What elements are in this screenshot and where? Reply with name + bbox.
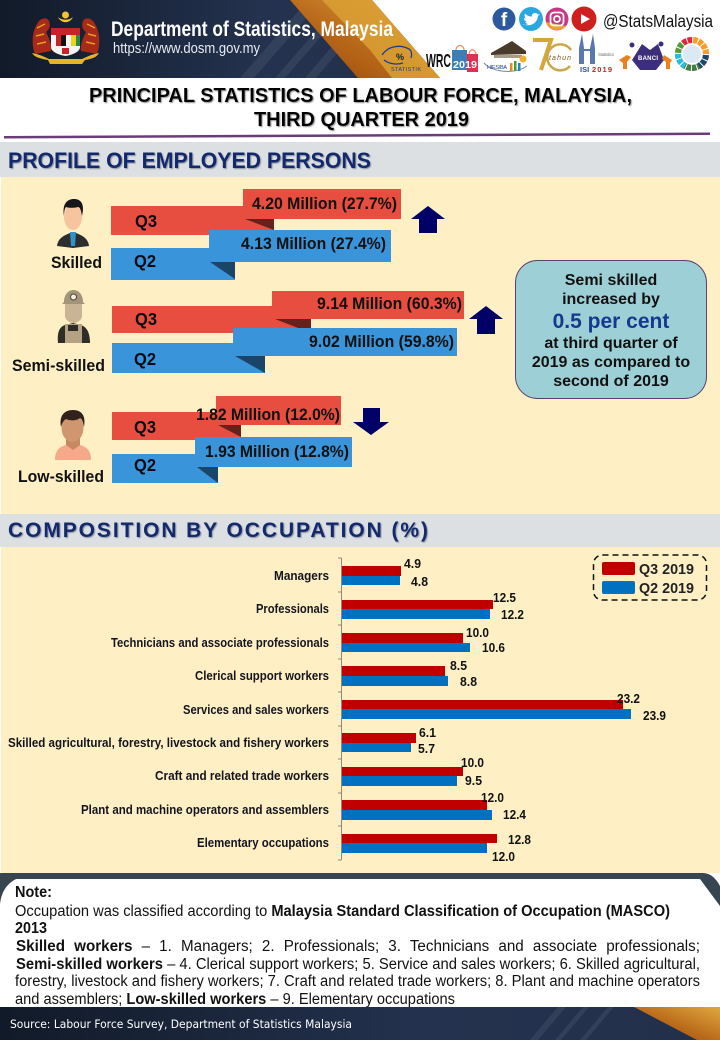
row: plant: Plant and machine operators and assemblers	[81, 803, 329, 817]
social media icons: f	[501, 10, 508, 31]
row: professionals: 12.5	[493, 591, 516, 605]
logo: ISI 2019: ISI	[580, 65, 589, 74]
icon: skilled worker	[57, 199, 89, 248]
icon: coat of arms	[32, 12, 99, 64]
row: plant: 12.0	[481, 791, 504, 805]
header url: https://www.dosm.gov.my	[113, 41, 261, 57]
logo: HIES/BA 2019	[484, 41, 527, 71]
logo: banci	[619, 42, 672, 70]
row: technicians	[111, 626, 505, 655]
panel: note: Occupation was classified according to Malaysia Standard Classification of Occupation (MASCO)	[15, 903, 670, 920]
label: low-skilled: Low-skilled	[18, 468, 104, 486]
row: skilled agricultural	[8, 726, 436, 756]
row: managers: 4.9	[404, 557, 421, 571]
chart: occupation bars	[8, 557, 666, 864]
logo: WRC 2019: WRC	[426, 51, 451, 71]
logo: ISI 2019	[579, 34, 615, 74]
logo: hari statistik negara: %	[396, 52, 404, 62]
ribbon: skilled Q2	[111, 230, 391, 280]
logo: ISI 2019: Statistics	[598, 52, 615, 57]
label: skilled: Skilled	[51, 254, 102, 272]
ribbon: low-skilled Q2	[112, 437, 352, 483]
arrow: low-skilled down	[353, 408, 389, 435]
icon: semi-skilled worker	[58, 290, 90, 343]
ribbon: skilled Q3: Q3	[135, 211, 157, 231]
row: clerical	[195, 659, 477, 689]
row: managers: Managers	[274, 569, 329, 583]
row: managers: 4.8	[411, 575, 428, 589]
ribbon: semi-skilled Q3: Q3	[135, 309, 157, 329]
row: technicians: 10.0	[466, 626, 489, 640]
callout: semi skilled increase: 2019 as compared to	[532, 354, 690, 371]
row: craft	[155, 756, 484, 788]
callout: semi skilled increase: 0.5 per cent	[553, 310, 669, 333]
event logos	[382, 34, 706, 74]
legend: Q3 2019	[639, 561, 694, 578]
source text: Source: Labour Force Survey, Department of Statistics Malaysia	[10, 1017, 352, 1031]
header title: Department of Statistics, Malaysia	[111, 17, 394, 41]
callout: semi skilled increase: at third quarter of	[544, 335, 678, 352]
callout: semi skilled increase: increased by	[562, 291, 660, 308]
ribbon: skilled Q3: 4.20 Million (27.7%)	[252, 195, 397, 213]
row: clerical: 8.8	[460, 675, 477, 689]
logo: hari statistik negara	[382, 46, 421, 73]
row: professionals: Professionals	[256, 602, 329, 616]
row: technicians: 10.6	[482, 641, 505, 655]
main title: PRINCIPAL STATISTICS OF LABOUR FORCE, MALAYSIA,	[89, 85, 632, 107]
callout: semi skilled increase: second of 2019	[553, 373, 669, 390]
row: services: 23.9	[643, 709, 666, 723]
logo: 70 tahun: tahun	[549, 55, 571, 62]
ribbon: skilled Q2: 4.13 Million (27.4%)	[241, 235, 386, 253]
label: semi-skilled: Semi-skilled	[12, 357, 105, 375]
row: craft: 10.0	[461, 756, 484, 770]
panel: note: Note:	[15, 884, 52, 901]
legend: Q2 2019	[639, 580, 694, 597]
row: services: 23.2	[617, 692, 640, 706]
row: skilled agricultural: 6.1	[419, 726, 436, 740]
footer	[0, 1007, 720, 1040]
logo: ISI 2019: 2019	[592, 65, 612, 74]
ribbon: low-skilled Q2: Q2	[134, 455, 156, 475]
row: elementary: 12.8	[508, 833, 531, 847]
group: skilled	[51, 189, 445, 280]
ribbon: low-skilled Q3: 1.82 Million (12.0%)	[196, 406, 340, 424]
panel: note: forestry, livestock and fishery workers; 7. Craft and related trade workers; 8. Plant and machine operators	[15, 973, 700, 990]
row: clerical: Clerical support workers	[195, 669, 329, 683]
header banner	[0, 0, 440, 78]
ribbon: low-skilled Q3: Q3	[134, 417, 156, 437]
logo: WRC 2019	[426, 46, 478, 72]
row: plant	[81, 791, 526, 822]
row: craft: 9.5	[465, 774, 482, 788]
row: services	[183, 692, 666, 723]
row: elementary: Elementary occupations	[197, 836, 329, 850]
ribbon: low-skilled Q2: 1.93 Million (12.8%)	[205, 443, 349, 461]
callout: semi skilled increase	[516, 260, 706, 398]
ribbon: semi-skilled Q2: 9.02 Million (59.8%)	[309, 333, 454, 351]
legend	[594, 555, 706, 600]
ribbon: semi-skilled Q2: Q2	[134, 349, 156, 369]
row: professionals: 12.2	[501, 608, 524, 622]
panel: composition by occupation	[0, 514, 720, 873]
row: professionals	[256, 591, 524, 622]
row: craft: Craft and related trade workers	[155, 769, 329, 783]
panel: note: 2013	[15, 920, 47, 937]
main title: THIRD QUARTER 2019	[254, 109, 469, 131]
panel: note	[0, 873, 720, 1010]
ribbon: skilled Q2: Q2	[134, 251, 156, 271]
social media icons	[492, 6, 596, 32]
logo: 70 tahun	[533, 40, 571, 70]
logo: WRC 2019: 2019	[453, 60, 477, 71]
row: skilled agricultural: Skilled agricultural, forestry, livestock and fishery workers	[8, 736, 329, 750]
group: semi-skilled	[12, 290, 503, 375]
logo: banci: BANCI	[638, 56, 658, 62]
row: managers	[274, 557, 428, 589]
ribbon: semi-skilled Q3: 9.14 Million (60.3%)	[317, 295, 462, 313]
callout: semi skilled increase: Semi skilled	[565, 272, 657, 289]
panel: note: Semi-skilled workers – 4. Clerical support workers; 5. Service and sales workers; 6. Skilled agricultural,	[16, 956, 700, 973]
panel: profile of employed persons	[0, 142, 720, 514]
logo: hari statistik negara: STATISTIK	[391, 67, 421, 73]
main title	[89, 85, 632, 131]
row: skilled agricultural: 5.7	[418, 742, 435, 756]
heading: profile of employed persons: PROFILE OF EMPLOYED PERSONS	[8, 148, 371, 173]
ribbon: semi-skilled Q2	[112, 328, 457, 373]
panel: note: and assemblers; Low-skilled workers – 9. Elementary occupations	[15, 991, 455, 1008]
row: elementary: 12.0	[492, 850, 515, 864]
arrow: skilled up	[411, 206, 445, 233]
row: clerical: 8.5	[450, 659, 467, 673]
row: elementary	[197, 833, 531, 864]
panel: note: Skilled workers – 1. Managers; 2. Professionals; 3. Technicians and associate professionals;	[16, 938, 700, 955]
ribbon: semi-skilled Q3	[112, 291, 464, 333]
icon: low-skilled worker	[55, 410, 91, 460]
group: low-skilled	[18, 396, 389, 486]
ribbon: low-skilled Q3	[112, 396, 341, 440]
row: services: Services and sales workers	[183, 703, 329, 717]
row: plant: 12.4	[503, 808, 526, 822]
row: technicians: Technicians and associate professionals	[111, 636, 329, 650]
heading: composition by occupation: COMPOSITION BY OCCUPATION (%)	[8, 519, 428, 542]
logo: SDG wheel	[678, 40, 706, 68]
arrow: semi-skilled up	[469, 306, 503, 334]
logo: HIES/BA 2019: HIES/BA	[487, 65, 507, 71]
ribbon: skilled Q3	[111, 189, 401, 235]
